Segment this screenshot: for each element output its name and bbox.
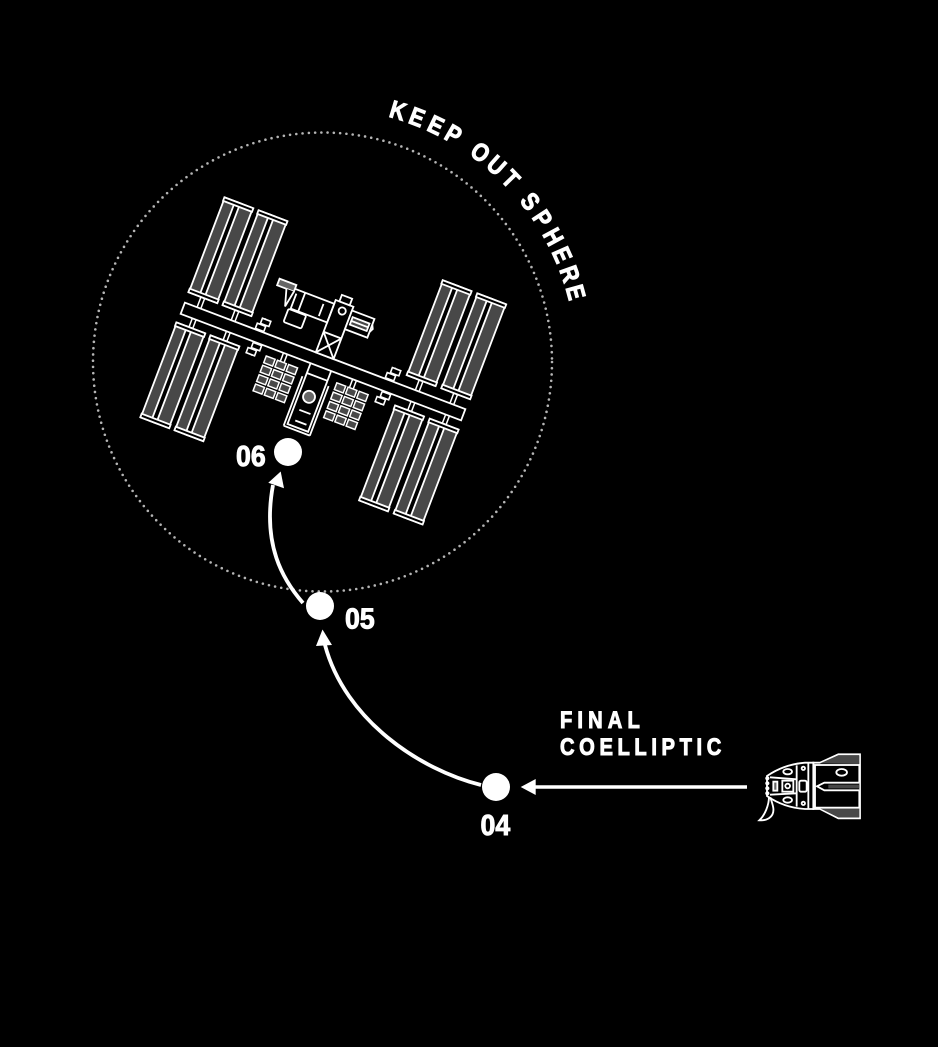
truss <box>181 303 465 420</box>
small equipment clusters <box>246 316 401 407</box>
waypoint 04 <box>480 773 511 841</box>
icon: spacecraft <box>759 754 860 820</box>
keep out sphere label: E <box>560 282 591 303</box>
waypoint 04: 04 <box>480 809 511 841</box>
waypoint 05: 05 <box>345 602 375 635</box>
solar arrays lower right <box>359 405 459 524</box>
radiator left <box>253 348 301 403</box>
space station <box>140 197 506 524</box>
keep out sphere label: O <box>465 136 496 168</box>
service module <box>813 754 860 818</box>
keep out sphere boundary <box>93 132 552 592</box>
nose strap <box>759 797 773 820</box>
right module <box>345 310 376 338</box>
solar arrays lower left <box>140 322 239 441</box>
label: final coelliptic: COELLIPTIC <box>560 733 721 760</box>
arrow from 04 to 05 <box>316 630 481 785</box>
left laboratory module and arm <box>266 279 336 336</box>
keep out sphere label: E <box>547 243 578 267</box>
arrow from spacecraft to 04 <box>521 779 747 795</box>
solar arrays upper left <box>188 197 287 316</box>
keep out sphere label: E <box>405 101 429 133</box>
keep out sphere label: H <box>537 223 569 250</box>
keep out sphere label <box>387 95 591 303</box>
lower module <box>284 362 334 436</box>
solar arrays upper right <box>407 280 506 399</box>
keep out sphere label: K <box>387 95 410 126</box>
crew capsule <box>766 763 813 809</box>
label: final coelliptic: FINAL <box>560 706 640 733</box>
keep out sphere label: P <box>527 205 558 232</box>
waypoint 06: 06 <box>236 440 266 472</box>
keep out sphere label: P <box>440 119 467 150</box>
keep out sphere label: U <box>481 150 512 181</box>
waypoint 05 <box>306 592 375 635</box>
arrow from 05 to 06 <box>268 472 303 603</box>
keep out sphere label: E <box>423 110 448 141</box>
keep out sphere label: S <box>515 187 546 216</box>
solar array connectors <box>189 297 458 425</box>
keep out sphere label: T <box>496 165 525 193</box>
radiator right <box>324 374 371 429</box>
label: final coelliptic <box>560 706 721 760</box>
keep out sphere label: R <box>554 262 586 286</box>
waypoint 06 <box>236 438 302 472</box>
upper node tower <box>316 293 356 359</box>
